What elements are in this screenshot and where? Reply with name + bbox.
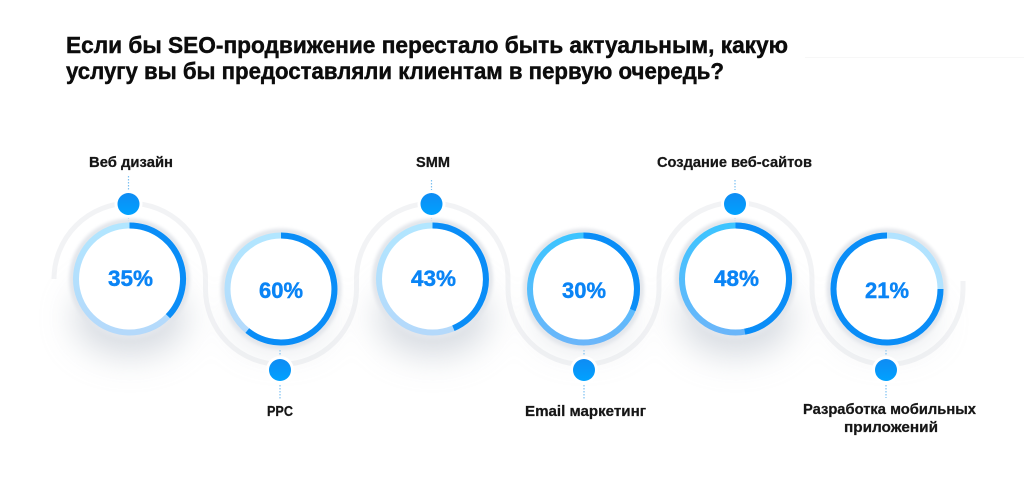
progress ring	[675, 218, 796, 340]
connector	[430, 180, 432, 222]
value: 21%	[865, 278, 909, 303]
value: 48%	[714, 266, 759, 291]
marker dot	[570, 356, 598, 384]
title: Если бы SEO-продвижение перестало быть актуальным, какую	[66, 32, 788, 58]
label: PPC: PPC	[267, 404, 293, 420]
marker dot	[872, 356, 900, 384]
title	[66, 32, 788, 84]
label: Разработка мобильных приложений: Разработка мобильных	[803, 402, 976, 418]
faint rule top right	[805, 57, 1024, 58]
connector	[734, 180, 736, 222]
progress ring	[220, 228, 342, 350]
drop shadows under circles	[74, 280, 937, 356]
item: SMM 43%	[372, 155, 493, 340]
marker dot	[418, 190, 446, 218]
label: Веб дизайн: Веб дизайн	[89, 155, 173, 171]
item: Создание веб-сайтов 48%	[657, 155, 812, 340]
progress ring	[372, 218, 493, 340]
marker dot	[266, 356, 294, 384]
progress ring	[69, 218, 190, 340]
label: Создание веб-сайтов: Создание веб-сайтов	[657, 155, 812, 171]
connector	[279, 350, 281, 399]
label: Разработка мобильных приложений	[803, 402, 976, 436]
value: 43%	[411, 266, 456, 291]
item: Веб дизайн 35%	[69, 155, 190, 340]
value: 60%	[259, 278, 303, 303]
value: 30%	[562, 278, 606, 303]
connecting wave line	[54, 203, 963, 364]
progress ring	[523, 228, 644, 350]
item: Email маркетинг 30%	[523, 228, 646, 420]
title: услугу вы бы предоставляли клиентам в первую очередь?	[66, 58, 724, 84]
item: PPC 60%	[220, 228, 342, 420]
value: 35%	[108, 266, 153, 291]
label: SMM: SMM	[416, 155, 450, 171]
label: Email маркетинг: Email маркетинг	[525, 404, 646, 420]
connector	[128, 176, 130, 222]
item: Разработка мобильных приложений 21%	[803, 228, 976, 436]
connector	[583, 350, 585, 399]
progress ring	[826, 228, 948, 350]
marker dot	[114, 190, 142, 218]
label: Разработка мобильных приложений: приложений	[844, 420, 938, 436]
marker dot	[721, 190, 749, 218]
connector	[885, 350, 887, 398]
